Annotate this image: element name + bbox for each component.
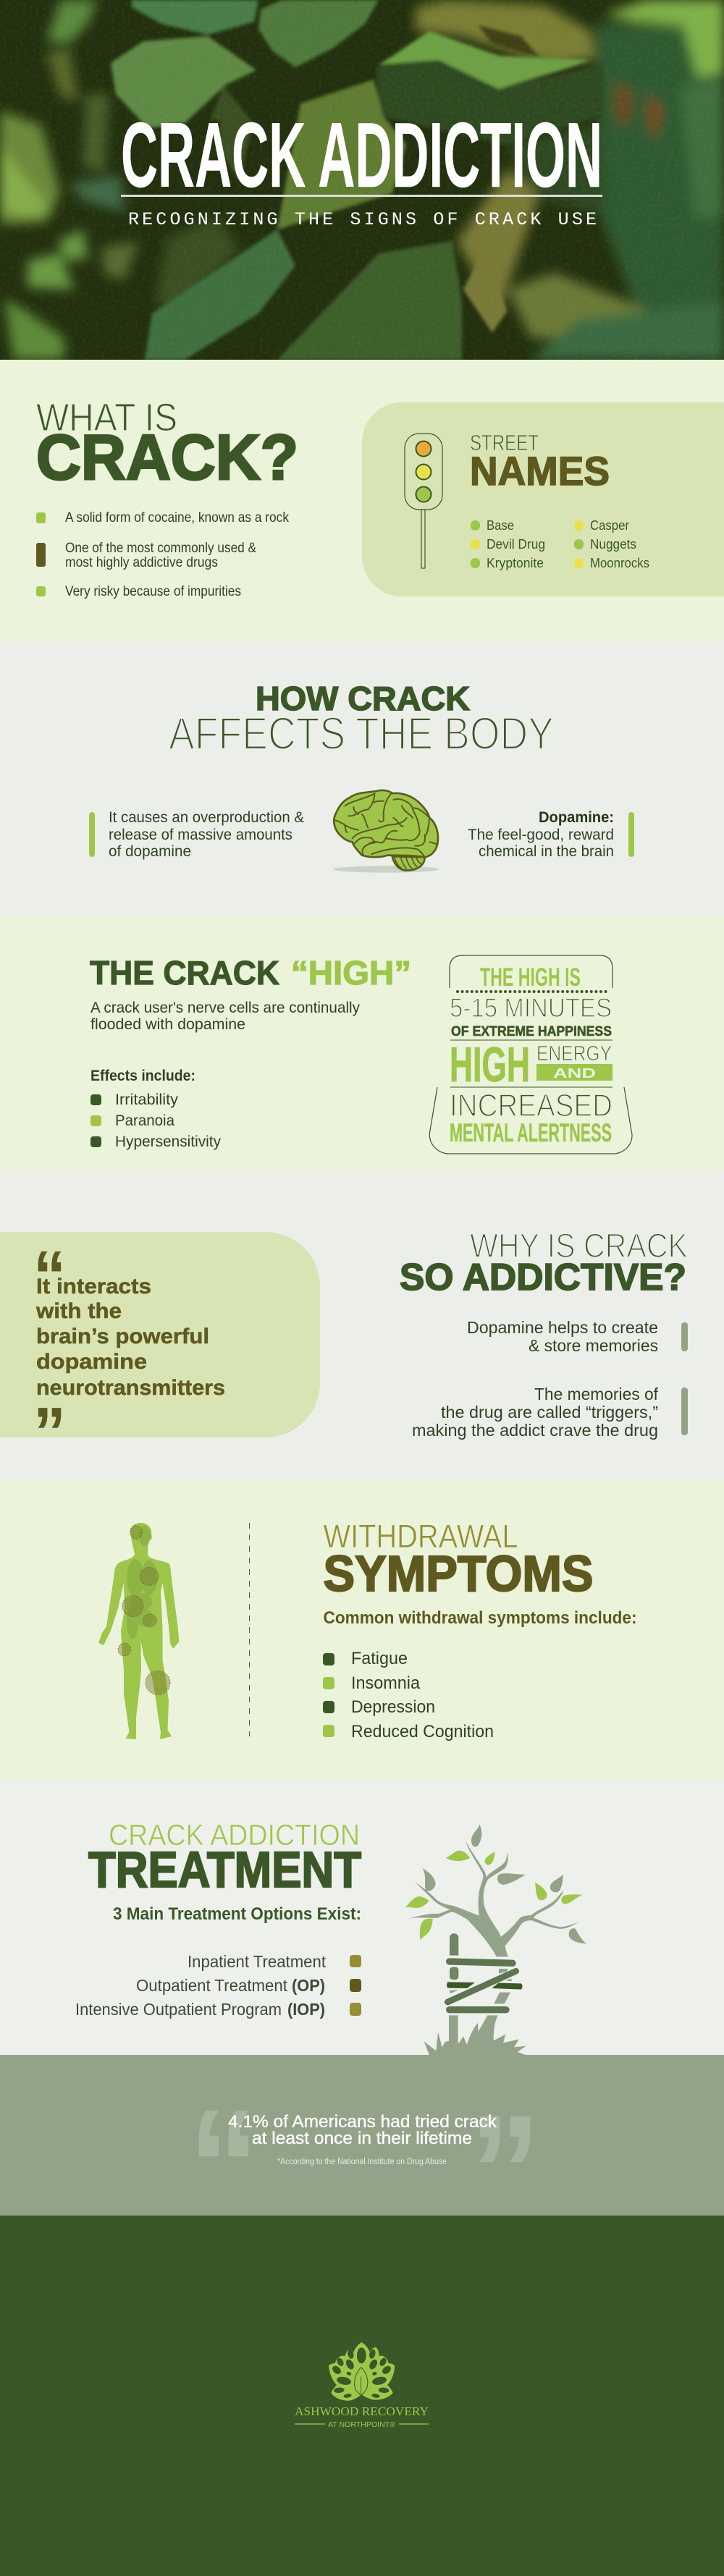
heading: street names: STREET [470, 430, 539, 455]
list: treatment options: Intensive Outpatient Program [75, 2000, 282, 2019]
list: treatment options: Outpatient Treatment [136, 1976, 288, 1995]
icon: splinted tree [405, 1825, 586, 2056]
heading: why is crack so addictive: SO ADDICTIVE? [400, 1257, 686, 1298]
statistic text: 4.1% of Americans had tried crack [228, 2112, 497, 2132]
list: crack facts: Very risky because of impurities [65, 584, 241, 599]
text block: dopamine: Dopamine: [539, 809, 614, 826]
text: treatment options: 3 Main Treatment Options Exist: [113, 1904, 361, 1924]
typographic callout: the high: THE HIGH IS [480, 963, 581, 992]
list: treatment options: Inpatient Treatment [188, 1952, 327, 1971]
text block: nerve cells: A crack user's nerve cells are continually [90, 999, 360, 1016]
list: crack facts [36, 510, 289, 599]
typographic callout: the high: HIGH [450, 1037, 530, 1092]
list: effects [90, 1067, 221, 1150]
list: symptoms [323, 1649, 494, 1741]
list: effects: Paranoia [115, 1112, 174, 1129]
list: street names: Kryptonite [487, 556, 544, 570]
logo wordmark: ASHWOOD RECOVERY [295, 2404, 429, 2418]
heading: how crack affects the body: AFFECTS THE BODY [169, 709, 554, 759]
text block: nerve cells [90, 999, 360, 1033]
text: common symptoms: Common withdrawal symptoms include: [323, 1608, 637, 1628]
icon: decorative quotes: “ [188, 2076, 259, 2257]
icon: closing quote: ” [33, 1393, 66, 1471]
quote text: dopamine [36, 1350, 147, 1374]
heading: what is crack: WHAT IS [36, 396, 177, 439]
list: symptoms: Reduced Cognition [351, 1722, 494, 1741]
subtitle: RECOGNIZING THE SIGNS OF CRACK USE [128, 209, 597, 230]
heading: crack addiction treatment: TREATMENT [88, 1841, 361, 1898]
icon: brain [333, 790, 439, 873]
list: street names: Moonrocks [590, 556, 649, 570]
icon: opening quote: “ [33, 1236, 66, 1315]
heading: how crack affects the body: HOW CRACK [256, 680, 470, 717]
list: treatment options: (IOP) [287, 2000, 325, 2019]
heading: withdrawal symptoms [323, 1518, 594, 1602]
list: street names: Devil Drug [487, 537, 545, 552]
typographic callout: the high: MENTAL ALERTNESS [450, 1119, 612, 1147]
text block: overproduction: of dopamine [109, 843, 191, 860]
panel: crack addiction treatment [0, 1781, 724, 2056]
typographic callout: the high: AND [553, 1066, 596, 1081]
heading: what is crack: CRACK? [36, 421, 298, 493]
heading: street names: NAMES [470, 448, 610, 494]
panel: what is crack [0, 360, 724, 641]
text block: triggers: the drug are called “triggers,” [441, 1403, 658, 1422]
heading: withdrawal symptoms: SYMPTOMS [323, 1545, 594, 1602]
list: treatment options: (OP) [292, 1976, 325, 1995]
icon: traffic light [405, 434, 442, 568]
list: crack facts: One of the most commonly used & [65, 541, 256, 556]
icon: leaf emblem [329, 2342, 395, 2401]
text block: triggers: making the addict crave the drug [412, 1421, 658, 1440]
text block: overproduction: release of massive amounts [109, 827, 292, 843]
quote text [35, 1275, 225, 1400]
footnote: *According to the National Institute on Drug Abuse [277, 2158, 447, 2166]
list: street names: Casper [590, 518, 629, 533]
heading: the crack high: “HIGH” [291, 954, 411, 992]
text block: dopamine memories [467, 1318, 688, 1355]
statistic text: at least once in their lifetime [252, 2129, 472, 2148]
quote text: neurotransmitters [36, 1376, 225, 1400]
heading: the crack high [90, 954, 411, 992]
hero photo: leaves [0, 0, 724, 360]
panel: footer [0, 2216, 724, 2576]
heading: the crack high: THE CRACK [90, 954, 279, 992]
list: symptoms: Fatigue [351, 1649, 408, 1668]
text block: dopamine memories: Dopamine helps to create [467, 1318, 658, 1337]
text block: dopamine: chemical in the brain [479, 843, 614, 860]
text block: overproduction [89, 809, 304, 860]
text block: dopamine memories: & store memories [529, 1336, 658, 1355]
quote text: It interacts [36, 1275, 151, 1298]
list: crack facts: most highly addictive drugs [65, 555, 218, 570]
heading: withdrawal symptoms: WITHDRAWAL [323, 1518, 518, 1555]
panel: statistic band [0, 2055, 724, 2263]
panel: street names [362, 402, 724, 596]
typographic callout: the high: 5-15 MINUTES [450, 993, 612, 1023]
text block: dopamine [468, 809, 634, 860]
heading: how crack affects the body [169, 680, 554, 759]
list: symptoms: Insomnia [351, 1673, 421, 1693]
typographic callout: the high: OF EXTREME HAPPINESS [451, 1023, 612, 1039]
heading: why is crack so addictive: WHY IS CRACK [470, 1226, 688, 1264]
text block: overproduction: It causes an overproduction & [109, 809, 304, 826]
list: street names: Nuggets [590, 537, 636, 552]
heading: why is crack so addictive [400, 1226, 688, 1298]
logo tagline: AT NORTHPOINT® [328, 2420, 395, 2429]
heading: crack addiction treatment: CRACK ADDICTION [109, 1818, 360, 1851]
text block: dopamine: The feel-good, reward [468, 827, 614, 843]
list: effects: Effects include: [90, 1067, 195, 1084]
typographic callout: the high: ENERGY [536, 1042, 612, 1065]
text block: triggers [412, 1385, 688, 1440]
icon: decorative quotes: ” [469, 2082, 541, 2263]
panel: why is crack so addictive [0, 1170, 724, 1479]
icon: decorative quotes [188, 2076, 541, 2263]
typographic callout: the high: INCREASED [450, 1088, 613, 1123]
heading: crack addiction treatment [88, 1818, 361, 1898]
list: effects: Irritability [115, 1091, 178, 1108]
quote text: brain’s powerful [36, 1325, 209, 1348]
statistic text [228, 2112, 497, 2148]
heading: street names [470, 430, 610, 494]
list: street names [471, 518, 649, 570]
list: symptoms: Depression [351, 1697, 435, 1717]
list: crack facts: A solid form of cocaine, known as a rock [65, 510, 289, 525]
text block: triggers: The memories of [534, 1385, 659, 1403]
panel: hero header [0, 0, 724, 360]
panel: how crack affects the body [0, 641, 724, 917]
logo: Ashwood Recovery [295, 2342, 429, 2429]
list: effects: Hypersensitivity [115, 1133, 221, 1150]
list: treatment options [75, 1952, 361, 2019]
panel: quote [0, 1232, 320, 1471]
quote text: with the [35, 1299, 122, 1323]
text block: nerve cells: flooded with dopamine [90, 1015, 245, 1033]
typographic callout: the high [429, 955, 632, 1154]
panel: the crack high [0, 917, 724, 1170]
icon: human body [98, 1523, 180, 1739]
list: street names: Base [487, 518, 514, 533]
panel: withdrawal symptoms [0, 1479, 724, 1781]
